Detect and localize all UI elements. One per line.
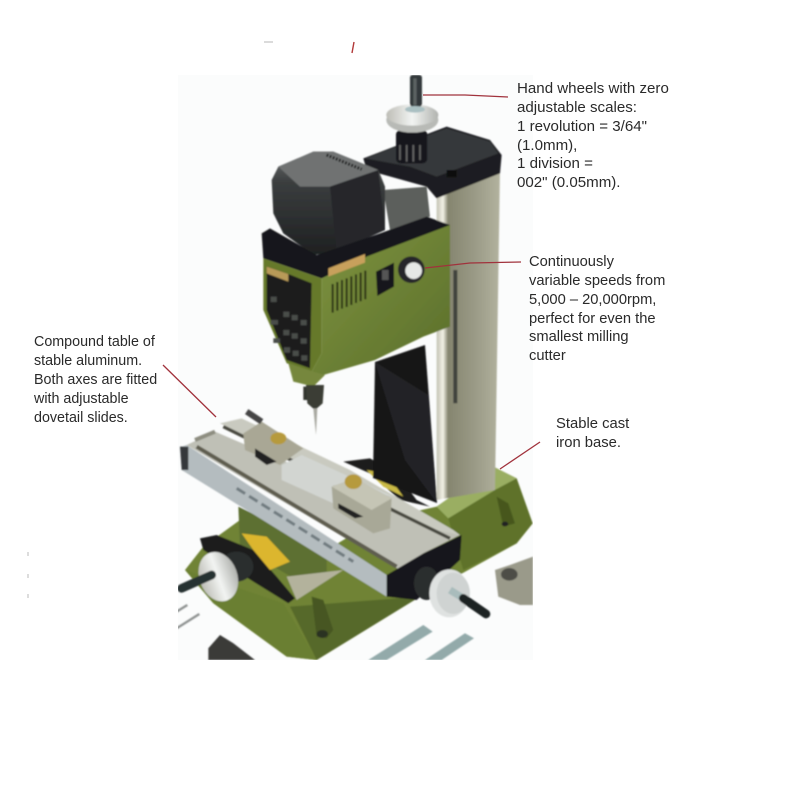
workpiece block bbox=[282, 455, 393, 503]
hand wheel bbox=[386, 75, 438, 163]
maker label bbox=[328, 254, 365, 277]
callout: hand wheels: 1 division = bbox=[517, 155, 593, 172]
left hand wheel bracket bbox=[182, 533, 295, 607]
photo background bbox=[178, 75, 533, 660]
motor cover bbox=[272, 152, 385, 255]
louvres bbox=[333, 271, 365, 313]
machine base bbox=[185, 458, 533, 660]
keypad panel bbox=[267, 267, 312, 368]
callout: variable speeds: 5,000 – 20,000rpm, bbox=[529, 292, 656, 308]
speed dial bbox=[398, 256, 425, 283]
black band bbox=[262, 217, 450, 278]
steel keys bbox=[368, 625, 474, 660]
compound table bbox=[177, 412, 533, 660]
photo: micro milling machine bbox=[177, 75, 533, 660]
right hand wheel bbox=[414, 567, 486, 617]
drill chuck and bit bbox=[306, 385, 324, 435]
callout: hand wheels: (1.0mm), bbox=[517, 137, 577, 154]
callout: variable speeds: variable speeds from bbox=[529, 273, 665, 289]
front slide face bbox=[180, 445, 387, 597]
callout: compound table: stable aluminum. bbox=[34, 353, 142, 369]
callout: compound table: Compound table of bbox=[34, 334, 155, 350]
end mills bbox=[208, 635, 255, 660]
top cap bbox=[363, 127, 502, 198]
vise jaw front bbox=[332, 474, 392, 533]
spindle nose bbox=[288, 363, 325, 387]
callout: compound table: with adjustable bbox=[33, 391, 129, 407]
milling head bbox=[262, 75, 502, 400]
callout: variable speeds: cutter bbox=[529, 348, 566, 364]
vise jaw rear bbox=[243, 412, 303, 465]
callout: cast iron base: Stable cast bbox=[556, 416, 629, 432]
callout: compound table: dovetail slides. bbox=[34, 410, 128, 426]
callout: hand wheels: adjustable scales: bbox=[517, 99, 637, 116]
stray marks bbox=[28, 42, 354, 598]
callout: hand wheels: 1 revolution = 3/64" bbox=[517, 118, 647, 135]
callout: cast iron base: iron base. bbox=[556, 435, 621, 451]
table top bbox=[187, 432, 460, 570]
table end bbox=[387, 535, 462, 600]
callout: variable speeds: perfect for even the bbox=[529, 311, 656, 327]
silver bracket part bbox=[495, 557, 533, 605]
callout: variable speeds: Continuously bbox=[529, 254, 615, 270]
callout: variable speeds: smallest milling bbox=[529, 329, 629, 345]
callout: compound table: Both axes are fitted bbox=[34, 372, 157, 388]
column bbox=[437, 170, 500, 500]
column black plate bbox=[373, 345, 437, 503]
green housing bbox=[263, 258, 322, 372]
leader lines bbox=[163, 95, 540, 469]
callout: hand wheels: 002" (0.05mm). bbox=[517, 174, 621, 191]
small pins bbox=[177, 605, 199, 628]
switch bbox=[376, 263, 394, 296]
callout: hand wheels: Hand wheels with zero bbox=[517, 80, 669, 97]
